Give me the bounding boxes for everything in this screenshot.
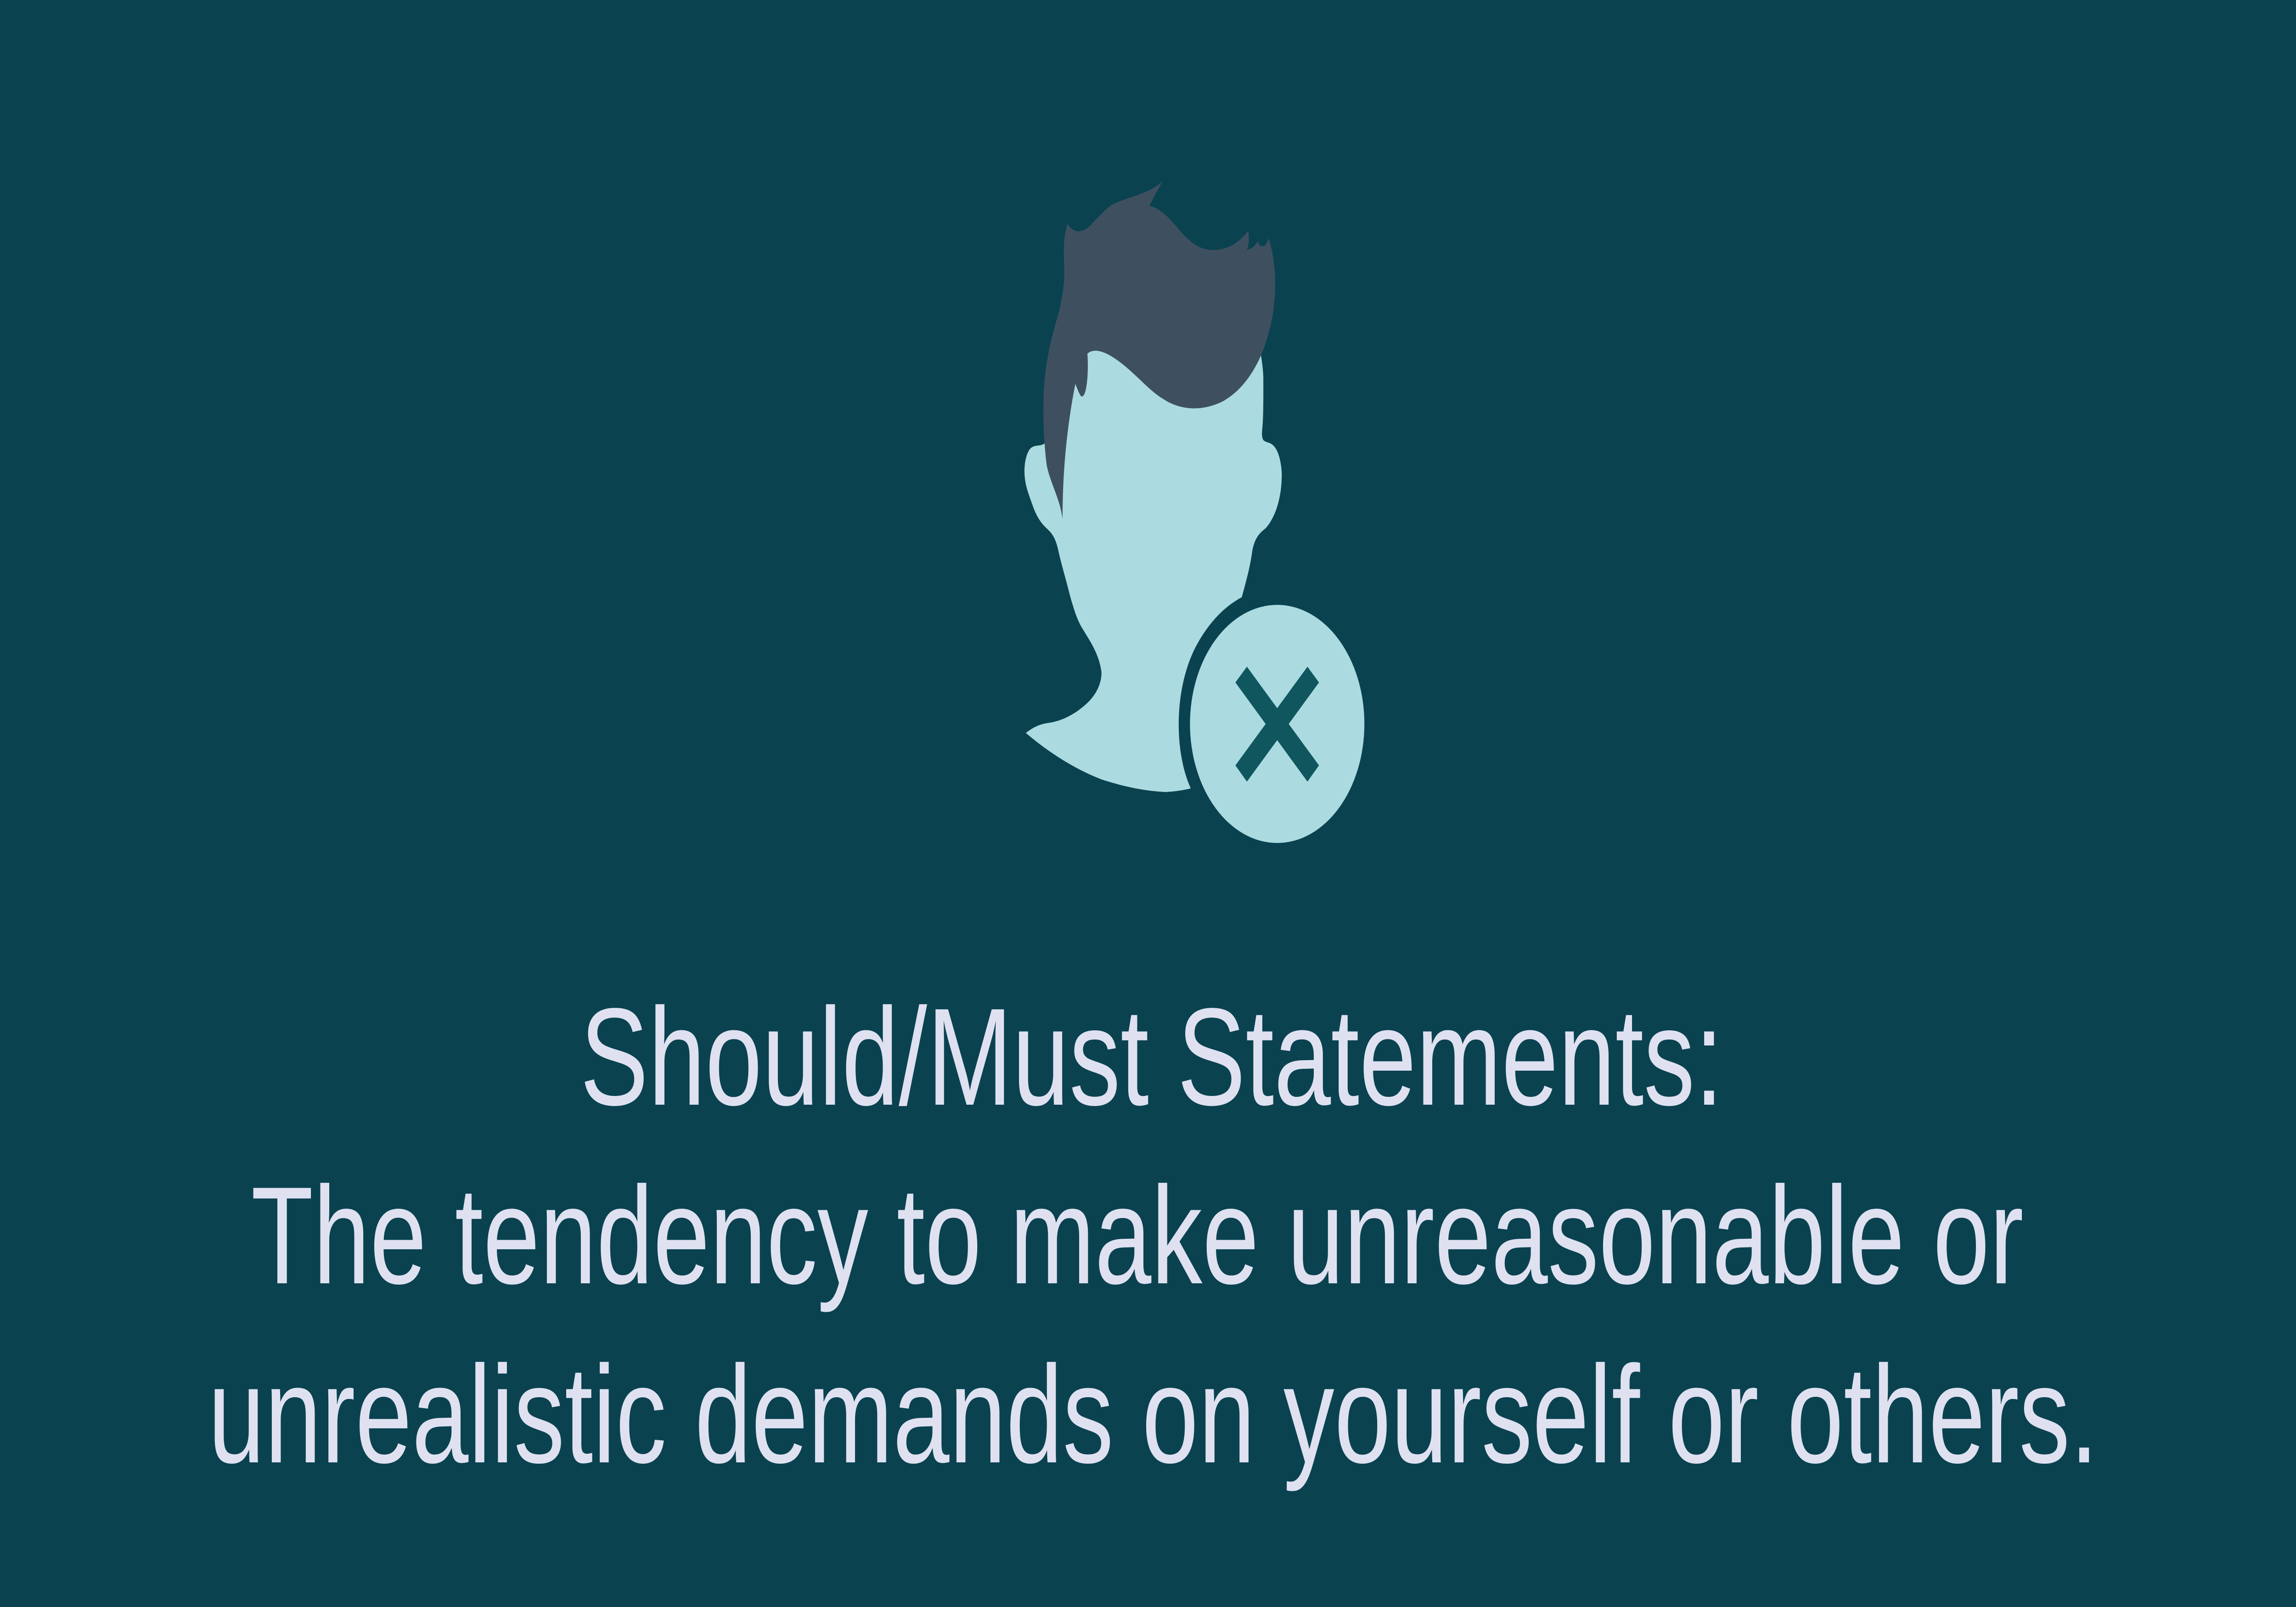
icon: hair bbox=[1043, 180, 1275, 519]
definition line 2: unrealistic demands on yourself or others. bbox=[208, 1337, 2098, 1493]
definition line 1: The tendency to make unreasonable or bbox=[251, 1158, 2024, 1314]
heading line: Should/Must Statements: bbox=[580, 980, 1723, 1135]
icon: badge circle bbox=[1190, 605, 1364, 843]
icon: head with X badge bbox=[1024, 180, 1364, 843]
title text block bbox=[208, 980, 2098, 1493]
icon: X mark bbox=[1235, 667, 1319, 781]
icon: head and shoulders silhouette bbox=[1024, 296, 1282, 792]
